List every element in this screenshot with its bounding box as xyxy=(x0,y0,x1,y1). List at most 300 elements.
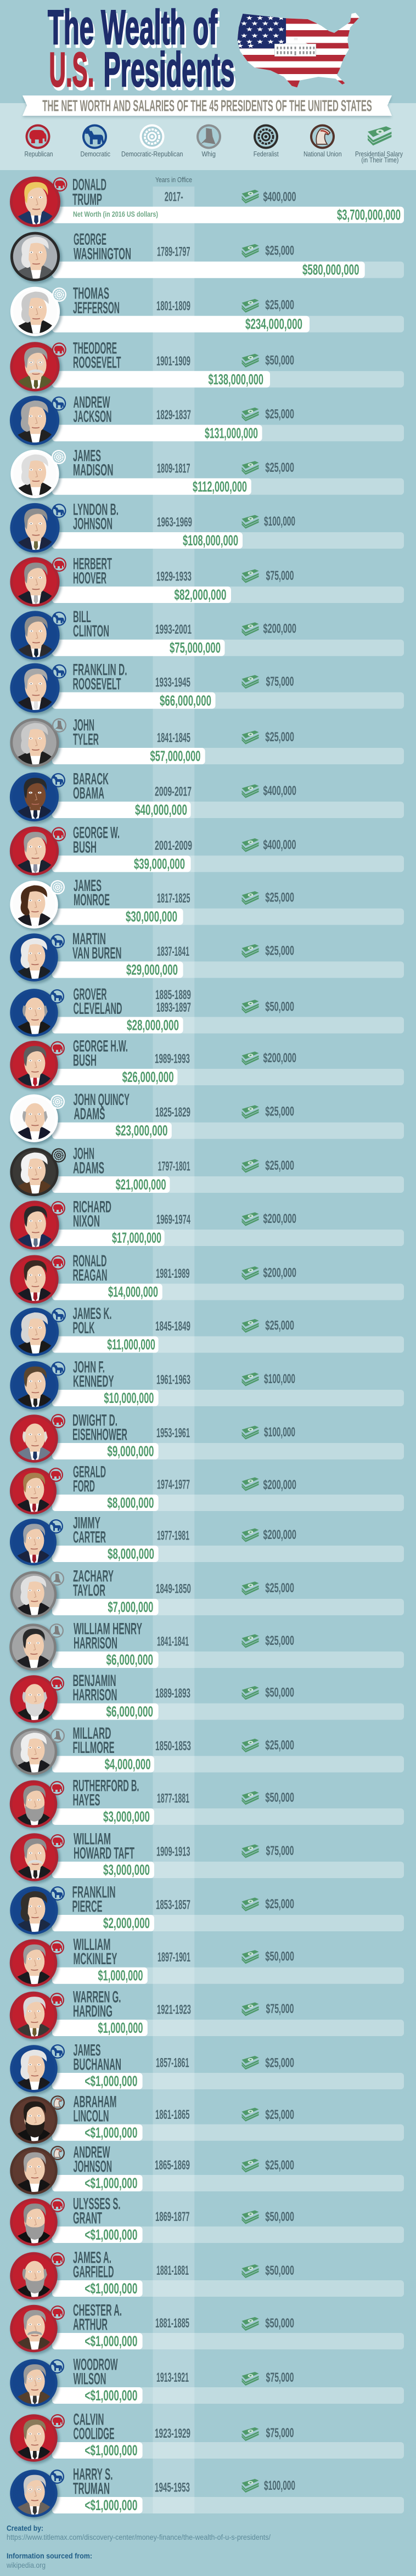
party badge xyxy=(50,2470,64,2484)
name: JAMES xyxy=(74,877,102,895)
legend: Republican xyxy=(24,125,53,158)
name: TRUMAN xyxy=(73,2480,110,2498)
row: Franklin D. Roosevelt xyxy=(10,661,404,715)
net worth bar xyxy=(52,802,404,818)
name: BARACK xyxy=(73,770,109,788)
title: The Wealth of xyxy=(49,3,219,58)
salary xyxy=(241,2209,294,2224)
portrait xyxy=(10,933,60,983)
portrait xyxy=(10,1468,59,1517)
row: Martin Van Buren xyxy=(10,930,404,983)
name xyxy=(73,770,109,802)
net worth bar xyxy=(52,478,404,495)
name xyxy=(73,285,120,317)
net worth bar xyxy=(52,371,404,387)
row: James Monroe xyxy=(10,877,404,931)
net worth bar xyxy=(52,2073,404,2089)
net worth bar: <$1,000,000 xyxy=(85,2333,137,2349)
portrait xyxy=(10,826,61,878)
years: 1969-1974 xyxy=(156,1213,190,1227)
net worth bar: $11,000,000 xyxy=(107,1337,155,1353)
legend: Presidential Salary xyxy=(355,126,403,164)
party badge xyxy=(50,1041,65,1056)
row: James K. Polk xyxy=(10,1305,404,1359)
row: William Henry Harrison xyxy=(9,1620,404,1672)
net worth bar: $234,000,000 xyxy=(245,316,302,332)
name xyxy=(73,2248,114,2281)
party badge xyxy=(49,1468,63,1482)
salary xyxy=(241,1266,296,1281)
salary xyxy=(241,622,296,636)
party badge xyxy=(50,2306,65,2320)
row: William McKinley xyxy=(10,1936,404,1989)
salary: $25,000 xyxy=(265,460,294,475)
portrait xyxy=(10,1041,60,1091)
name xyxy=(72,1724,114,1757)
party badge xyxy=(50,1095,65,1109)
net worth bar: $14,000,000 xyxy=(108,1284,158,1300)
portrait xyxy=(9,1624,58,1672)
portrait xyxy=(10,611,62,662)
name xyxy=(73,1198,111,1230)
party badge xyxy=(50,1571,64,1586)
portrait xyxy=(10,396,61,447)
portrait xyxy=(10,1414,60,1465)
portrait xyxy=(10,1780,59,1830)
net worth bar xyxy=(52,961,404,978)
net worth bar xyxy=(52,587,404,603)
years: 1893-1897 xyxy=(156,1000,191,1015)
years: 1885-1889 xyxy=(155,988,191,1002)
name xyxy=(73,2195,121,2228)
row: John Quincy Adams: JOHN QUINCY xyxy=(74,1091,130,1109)
name: HARRISON xyxy=(72,1686,117,1704)
net worth bar: <$1,000,000 xyxy=(85,2387,137,2404)
portrait xyxy=(10,1833,60,1883)
years: 1945-1953 xyxy=(155,2480,190,2495)
salary: $50,000 xyxy=(265,353,294,368)
salary: $200,000 xyxy=(263,1266,296,1281)
row: Andrew Jackson xyxy=(10,393,404,447)
years: 1929-1933 xyxy=(156,570,192,584)
row: Thomas Jefferson: JEFFERSON xyxy=(73,299,120,317)
salary: $50,000 xyxy=(265,1949,294,1964)
party badge xyxy=(53,177,67,191)
name xyxy=(73,2466,113,2498)
years: 1889-1893 xyxy=(155,1686,190,1701)
row: George H.W. Bush: GEORGE H.W. xyxy=(73,1037,128,1056)
name: HOWARD TAFT xyxy=(74,1845,134,1862)
years: 1801-1809 xyxy=(156,299,190,314)
salary: $400,000 xyxy=(263,783,296,798)
name: MCKINLEY xyxy=(74,1950,117,1968)
years: 1993-2001 xyxy=(155,622,192,637)
legend: National Union xyxy=(303,125,342,158)
net worth bar xyxy=(52,1069,404,1085)
years: 1853-1857 xyxy=(156,1897,190,1913)
name: WILSON xyxy=(74,2370,106,2388)
salary xyxy=(241,460,294,475)
salary: $50,000 xyxy=(265,1790,294,1805)
years in office heading: Years in Office xyxy=(155,176,192,184)
years: 1989-1993 xyxy=(155,1051,190,1067)
name: GROVER xyxy=(74,985,107,1004)
years: 1849-1850 xyxy=(156,1581,191,1597)
years: 2001-2009 xyxy=(155,838,192,853)
net worth bar: $112,000,000 xyxy=(193,478,247,495)
portrait xyxy=(10,2147,60,2197)
row: Zachary Taylor xyxy=(10,1567,404,1620)
row: Andrew Johnson xyxy=(10,2143,404,2197)
name: BENJAMIN xyxy=(72,1672,116,1690)
name xyxy=(74,2411,114,2443)
years: 1909-1913 xyxy=(156,1845,190,1859)
party badge xyxy=(50,934,65,948)
legend: National Union: National Union xyxy=(303,150,342,158)
net worth bar xyxy=(52,1599,404,1615)
years: 2017- xyxy=(165,190,183,205)
party badge xyxy=(50,2414,65,2428)
row: William Howard Taft xyxy=(10,1830,404,1883)
salary: $25,000 xyxy=(265,1581,294,1596)
name: GRANT xyxy=(73,2209,102,2228)
salary xyxy=(241,837,296,852)
salary: $200,000 xyxy=(263,1051,296,1066)
name xyxy=(74,393,112,426)
salary: $100,000 xyxy=(264,514,295,529)
years: 1857-1861 xyxy=(156,2055,189,2071)
name: PIERCE xyxy=(72,1897,102,1916)
party badge xyxy=(50,2359,64,2374)
name xyxy=(73,447,113,479)
row: Harry S. Truman xyxy=(10,2466,404,2519)
net worth bar xyxy=(52,640,404,656)
salary: $400,000 xyxy=(263,190,296,205)
net worth bar xyxy=(52,1703,404,1720)
name: LYNDON B. xyxy=(73,500,119,519)
net worth bar: $29,000,000 xyxy=(126,961,178,978)
net worth bar xyxy=(52,532,404,549)
net worth bar xyxy=(52,2442,404,2459)
name xyxy=(72,1883,115,1916)
years: 1877-1881 xyxy=(157,1791,189,1806)
portrait xyxy=(10,2096,60,2146)
net worth bar: $75,000,000 xyxy=(170,640,221,656)
salary xyxy=(241,2107,294,2122)
name: JOHN xyxy=(73,1145,94,1163)
row: Warren G. Harding xyxy=(10,1988,404,2041)
party badge xyxy=(52,504,66,518)
title xyxy=(48,0,236,100)
net worth bar xyxy=(52,1546,404,1562)
net worth bar xyxy=(52,2497,404,2513)
name xyxy=(72,1305,112,1337)
salary: $25,000 xyxy=(265,2158,294,2173)
legend: Whig: Whig xyxy=(202,150,216,158)
net worth bar: $8,000,000 xyxy=(107,1495,154,1511)
row: Benjamin Harrison xyxy=(10,1672,404,1725)
net worth bar xyxy=(52,1390,404,1406)
name: OBAMA xyxy=(73,785,104,802)
salary xyxy=(241,2370,294,2386)
name: TRUMP xyxy=(72,190,102,208)
salary xyxy=(241,730,294,745)
salary xyxy=(241,2426,294,2441)
salary: $200,000 xyxy=(263,1527,296,1542)
salary xyxy=(241,353,294,368)
net worth bar xyxy=(52,2020,404,2036)
name: WASHINGTON xyxy=(74,245,131,263)
name xyxy=(72,176,106,208)
years: 1809-1817 xyxy=(157,461,190,476)
net worth bar xyxy=(52,1495,404,1511)
salary xyxy=(241,674,294,689)
years: 1953-1961 xyxy=(156,1425,190,1441)
name xyxy=(73,1145,104,1177)
name: BUSH xyxy=(73,1051,97,1070)
salary: $50,000 xyxy=(265,1686,294,1700)
name: ADAMS xyxy=(73,1159,104,1177)
salary xyxy=(241,1051,296,1066)
salary xyxy=(241,1211,296,1226)
name: HARRISON xyxy=(74,1634,117,1653)
years: 1797-1801 xyxy=(158,1159,190,1174)
name xyxy=(74,985,122,1018)
party badge xyxy=(50,1940,64,1954)
party badge xyxy=(50,1993,64,2007)
portrait xyxy=(10,1886,60,1937)
years xyxy=(155,988,191,1015)
name: TAYLOR xyxy=(73,1581,105,1600)
name: WILLIAM HENRY xyxy=(74,1620,142,1638)
row: Ulysses S. Grant: ULYSSES S. xyxy=(73,2195,121,2213)
name xyxy=(72,1252,108,1284)
row: Millard Fillmore: FILLMORE xyxy=(72,1739,114,1757)
row: Richard Nixon xyxy=(10,1198,404,1252)
salary xyxy=(241,2316,294,2331)
row: James Buchanan xyxy=(10,2041,404,2095)
portrait xyxy=(10,2045,60,2095)
salary xyxy=(241,943,294,958)
row: Jimmy Carter: CARTER xyxy=(73,1529,106,1546)
row: Dwight D. Eisenhower xyxy=(10,1411,404,1465)
name xyxy=(74,230,131,263)
name xyxy=(72,1777,139,1810)
net worth bar: <$1,000,000 xyxy=(85,2442,137,2459)
net worth bar: $26,000,000 xyxy=(122,1069,174,1085)
net worth bar xyxy=(52,2175,404,2191)
name: FORD xyxy=(73,1477,95,1496)
party badge xyxy=(52,1308,66,1322)
years in office column xyxy=(153,187,194,2513)
years: 1869-1877 xyxy=(155,2209,190,2224)
years: 2009-2017 xyxy=(155,785,192,799)
title: The Wealth of xyxy=(48,0,217,54)
salary xyxy=(241,244,294,258)
net worth bar: <$1,000,000 xyxy=(85,2073,137,2089)
party badge xyxy=(51,1255,65,1270)
net worth bar: $28,000,000 xyxy=(127,1017,179,1034)
net worth bar xyxy=(52,262,404,278)
name: MADISON xyxy=(73,461,113,479)
name: GEORGE xyxy=(74,230,106,249)
name: JOHNSON xyxy=(73,515,113,533)
row: James Monroe: MONROE xyxy=(74,891,110,909)
salary: $100,000 xyxy=(264,1425,295,1440)
salary xyxy=(241,407,294,421)
salary xyxy=(241,1949,294,1964)
party badge xyxy=(51,1201,65,1215)
row: Woodrow Wilson xyxy=(10,2356,404,2409)
salary: $25,000 xyxy=(265,244,294,258)
net worth bar: $4,000,000 xyxy=(105,1756,151,1772)
salary: $75,000 xyxy=(266,2370,294,2385)
salary: $25,000 xyxy=(265,1104,294,1119)
net worth bar: $10,000,000 xyxy=(104,1390,154,1406)
row: Herbert Hoover xyxy=(10,555,404,609)
salary: $25,000 xyxy=(265,890,294,905)
name: HARRY S. xyxy=(73,2466,113,2483)
party badge xyxy=(52,450,66,464)
name xyxy=(73,1037,128,1070)
row: Millard Fillmore xyxy=(10,1724,404,1777)
salary xyxy=(241,1158,294,1173)
title: Presidents xyxy=(105,46,236,100)
portrait xyxy=(10,2414,60,2464)
row: John F. Kennedy xyxy=(10,1359,404,1412)
salary: $75,000 xyxy=(266,674,294,689)
row: Woodrow Wilson: WOODROW xyxy=(74,2356,118,2374)
years: 1933-1945 xyxy=(155,675,190,690)
name: VAN BUREN xyxy=(72,944,122,962)
row: Dwight D. Eisenhower: EISENHOWER xyxy=(72,1425,127,1444)
name: JIMMY xyxy=(73,1514,100,1532)
name xyxy=(73,500,119,533)
salary xyxy=(241,1318,294,1333)
name xyxy=(74,2093,116,2126)
net worth bar: $1,000,000 xyxy=(98,2020,143,2036)
portrait xyxy=(10,1675,60,1725)
portrait xyxy=(10,1094,60,1145)
row: Barack Obama xyxy=(10,770,404,824)
net worth bar xyxy=(52,909,404,925)
party badge xyxy=(50,2252,65,2267)
row: Jimmy Carter xyxy=(10,1514,404,1568)
name xyxy=(74,2143,112,2176)
years: 1977-1981 xyxy=(157,1529,189,1543)
party badge xyxy=(50,2095,65,2110)
net worth bar: $108,000,000 xyxy=(183,532,238,549)
salary: $25,000 xyxy=(265,943,294,958)
portrait xyxy=(10,287,62,339)
salary: $75,000 xyxy=(266,568,294,583)
row: Lyndon B. Johnson xyxy=(10,500,404,555)
row: Calvin Coolidge: COOLIDGE xyxy=(74,2425,114,2443)
party badge xyxy=(50,2044,65,2059)
years: 1897-1901 xyxy=(158,1950,190,1965)
net worth bar: $17,000,000 xyxy=(112,1230,161,1246)
years: 1789-1797 xyxy=(157,245,190,260)
salary: $75,000 xyxy=(266,2426,294,2440)
row: John Tyler: TYLER xyxy=(73,731,99,748)
legend: Democratic xyxy=(80,125,110,158)
name xyxy=(74,1936,117,1968)
row: John Quincy Adams xyxy=(10,1091,404,1145)
salary xyxy=(241,190,296,205)
row: Bill Clinton: CLINTON xyxy=(73,622,109,640)
net worth bar: $131,000,000 xyxy=(205,425,258,441)
legend: Presidential Salary: Presidential Salary xyxy=(355,150,403,158)
salary: $200,000 xyxy=(263,1478,296,1492)
legend: Presidential Salary: (in Their Time) xyxy=(361,156,398,164)
row: Ronald Reagan xyxy=(10,1252,404,1306)
portrait xyxy=(10,989,60,1039)
net worth bar: <$1,000,000 xyxy=(85,2497,137,2513)
party badge xyxy=(50,2146,65,2160)
name xyxy=(73,608,109,640)
party badge xyxy=(51,1414,65,1428)
name: WILLIAM xyxy=(74,1936,111,1954)
party badge xyxy=(52,612,66,626)
portrait xyxy=(10,2199,60,2248)
row: George Washington xyxy=(10,230,404,284)
name: JOHN xyxy=(73,717,94,734)
name: JAMES xyxy=(74,2041,101,2060)
net worth bar xyxy=(52,748,404,764)
name xyxy=(73,1463,106,1496)
salary xyxy=(241,298,294,313)
name: ANDREW xyxy=(74,2143,110,2162)
row: Theodore Roosevelt xyxy=(10,339,404,393)
years: 1901-1909 xyxy=(156,354,190,369)
row: Ronald Reagan: REAGAN xyxy=(72,1266,108,1284)
row: James A. Garfield xyxy=(10,2248,404,2302)
salary: $50,000 xyxy=(265,2263,294,2278)
net worth bar: <$1,000,000 xyxy=(85,2124,137,2141)
net worth bar xyxy=(52,1176,404,1193)
salary xyxy=(241,1527,296,1542)
salary xyxy=(241,1633,294,1648)
years: 1837-1841 xyxy=(157,944,189,959)
name: FRANKLIN xyxy=(72,1883,115,1902)
row: Chester A. Arthur: CHESTER A. xyxy=(73,2301,122,2320)
row: Chester A. Arthur xyxy=(10,2301,404,2354)
row: Grover Cleveland xyxy=(10,985,404,1039)
portrait xyxy=(10,1728,59,1777)
party badge xyxy=(50,2198,65,2212)
net worth bar: $39,000,000 xyxy=(134,855,185,872)
name xyxy=(74,1830,134,1862)
salary xyxy=(241,1104,294,1119)
salary xyxy=(241,2158,294,2173)
salary xyxy=(241,1897,294,1912)
years: 1861-1865 xyxy=(155,2107,190,2122)
portrait xyxy=(10,1148,61,1198)
salary: $100,000 xyxy=(264,1372,295,1386)
salary xyxy=(241,1000,294,1014)
name xyxy=(73,1359,114,1390)
salary: $25,000 xyxy=(265,1158,294,1173)
party badge xyxy=(52,288,66,302)
portrait xyxy=(10,557,61,609)
row: Donald Trump xyxy=(10,176,404,229)
salary: $50,000 xyxy=(265,1000,294,1014)
net worth bar: $30,000,000 xyxy=(126,909,177,925)
row: Rutherford B. Hayes: RUTHERFORD B. xyxy=(72,1777,139,1795)
row: Ronald Reagan: RONALD xyxy=(72,1252,106,1270)
years: 1921-1923 xyxy=(157,2003,191,2017)
title: U.S. xyxy=(49,42,94,97)
